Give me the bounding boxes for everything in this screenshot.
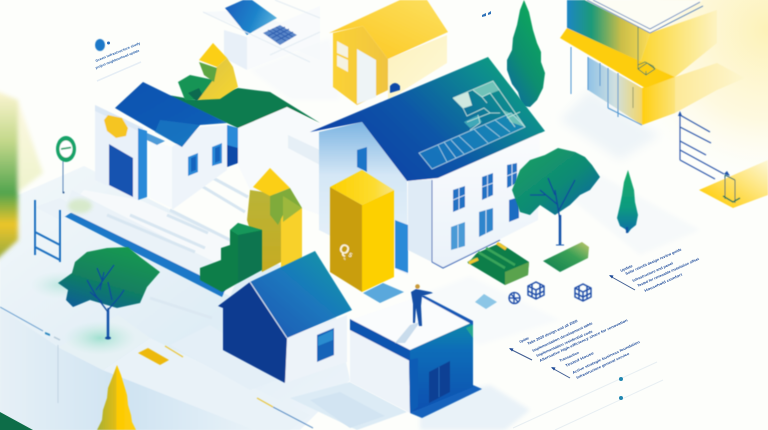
annotation: upper right xyxy=(609,247,700,293)
tower label: 5 xyxy=(347,252,353,260)
left tree tile xyxy=(30,271,150,370)
top left note: Green infrastructure study xyxy=(95,41,141,63)
icon: blue mesh pad xyxy=(263,25,297,45)
yellow house xyxy=(329,0,448,105)
green stepped block xyxy=(468,243,529,285)
annotation: lower left: Update xyxy=(519,336,530,344)
icon: wire cube xyxy=(528,282,544,299)
left edge foliage xyxy=(0,90,43,262)
annotation: lower left: Implementation residential code xyxy=(536,329,593,358)
icon: wireframe box xyxy=(638,62,655,75)
annotation: lower left: Alternative high-efficiency share for renovation xyxy=(539,318,628,363)
green roof xyxy=(168,88,320,128)
green slab xyxy=(543,242,589,272)
left wall xyxy=(95,105,143,200)
main house xyxy=(310,57,545,275)
top small marks xyxy=(482,11,491,17)
icon: blue mesh pad xyxy=(475,294,497,309)
annotation: lower middle: Active strategic business foundation xyxy=(572,340,640,375)
left tree xyxy=(58,247,160,340)
annotation: lower middle: Infrastructure general service xyxy=(576,352,630,380)
blue pillar xyxy=(138,128,147,200)
roof xyxy=(310,57,545,181)
blue door xyxy=(109,144,133,197)
right ladder and yellow patch xyxy=(678,111,768,208)
timeline lines xyxy=(513,362,663,430)
white extension xyxy=(238,107,320,215)
annotation: upper right: Update xyxy=(620,264,633,273)
arrow xyxy=(609,275,635,290)
annotation: upper right: Solar retrofit design review guide xyxy=(625,247,682,276)
tower label: Q xyxy=(337,240,352,258)
solar panels xyxy=(419,81,525,169)
top right yellow glow xyxy=(600,0,768,200)
arrow xyxy=(551,367,570,378)
top left note: project neighbourhood update xyxy=(95,49,140,70)
annotation: upper right: Infrastructure and panel xyxy=(632,261,674,283)
right poplar xyxy=(617,170,638,233)
steps and plaza of left house xyxy=(62,178,250,318)
tall cypress xyxy=(507,0,545,107)
icon: wire cube xyxy=(575,284,591,301)
small pattern icons xyxy=(475,282,591,309)
front wall xyxy=(408,131,540,268)
blue roof xyxy=(115,82,227,147)
top centre blue roof building xyxy=(203,0,320,70)
blue house xyxy=(218,251,352,383)
left ladder xyxy=(35,198,92,262)
gable wall xyxy=(319,122,408,275)
rooftop building xyxy=(350,295,482,418)
door xyxy=(429,361,450,403)
yellow emblem xyxy=(104,115,128,138)
annotation: lower left: Take 2020 design and all 2050 xyxy=(527,319,578,346)
ground markings xyxy=(0,307,313,428)
window xyxy=(317,328,334,362)
person on roof xyxy=(411,284,433,326)
tower label: % xyxy=(343,256,347,261)
icon: wire sphere xyxy=(509,292,520,304)
windows xyxy=(451,163,519,250)
centre yellow green tower xyxy=(247,168,302,272)
right tree xyxy=(512,148,600,245)
windows xyxy=(188,153,198,176)
annotation: lower middle: Tested House xyxy=(565,351,595,368)
dark green corner xyxy=(0,412,33,430)
annotation: lower middle xyxy=(551,340,640,380)
gable wall xyxy=(150,140,172,208)
left white house xyxy=(95,82,320,215)
top right yellow building xyxy=(560,0,745,125)
blue pavement tile xyxy=(363,283,404,303)
green stair block xyxy=(200,223,262,292)
yellow rock xyxy=(178,43,238,101)
yellow storage tower xyxy=(330,170,394,292)
annotation: upper right: Tested for renewable installation offset xyxy=(637,257,700,288)
annotation: lower left xyxy=(509,318,628,363)
annotation: lower left: Implementation development table xyxy=(532,321,593,353)
sign post xyxy=(56,136,76,194)
annotation: lower middle: Transaction xyxy=(559,351,580,363)
top left note xyxy=(95,39,141,81)
chimney xyxy=(390,83,400,93)
annotation: upper right: Household comfort xyxy=(644,272,684,293)
arrow xyxy=(509,348,532,360)
doorway xyxy=(357,49,376,104)
icon: blue dot marker xyxy=(95,39,110,51)
yellow poplar xyxy=(97,365,136,430)
